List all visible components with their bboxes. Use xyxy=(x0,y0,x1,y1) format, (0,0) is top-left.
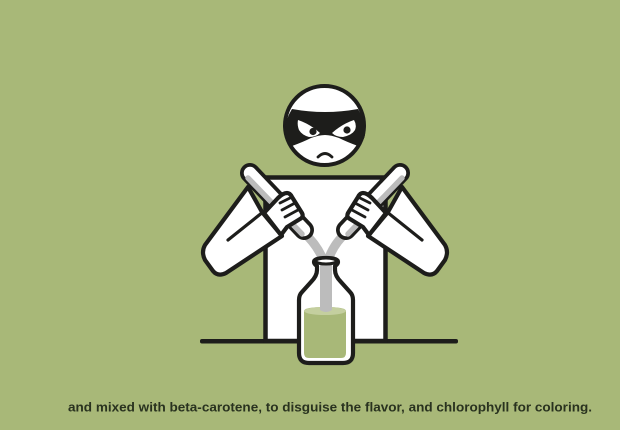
head circle xyxy=(285,86,364,165)
bottle mouth xyxy=(316,258,336,264)
bottle glass xyxy=(299,258,353,363)
head with bandit mask xyxy=(285,86,365,165)
right pupil xyxy=(343,126,351,134)
bottle xyxy=(299,258,353,363)
pouring stream xyxy=(320,263,332,312)
left test tube xyxy=(248,173,304,234)
left pupil xyxy=(309,128,317,135)
caption: and mixed with beta-carotene, to disguise the flavor, and chlorophyll for coloring. xyxy=(68,400,592,414)
feed tubes into bottle xyxy=(303,232,347,264)
right sleeve crease xyxy=(387,212,422,240)
figure body xyxy=(266,178,386,341)
left sleeve crease xyxy=(228,212,263,240)
table line xyxy=(200,339,458,344)
right sleeve xyxy=(368,187,447,275)
mouth xyxy=(318,154,332,157)
left hand xyxy=(264,193,303,235)
right hand xyxy=(347,193,386,235)
right test tube xyxy=(346,173,402,234)
left arm xyxy=(203,173,304,275)
right eye xyxy=(332,120,356,137)
left eye xyxy=(298,120,320,137)
left sleeve xyxy=(203,187,282,275)
right arm xyxy=(346,173,447,275)
mask xyxy=(285,109,365,146)
liquid surface xyxy=(304,307,346,315)
liquid xyxy=(304,307,346,358)
